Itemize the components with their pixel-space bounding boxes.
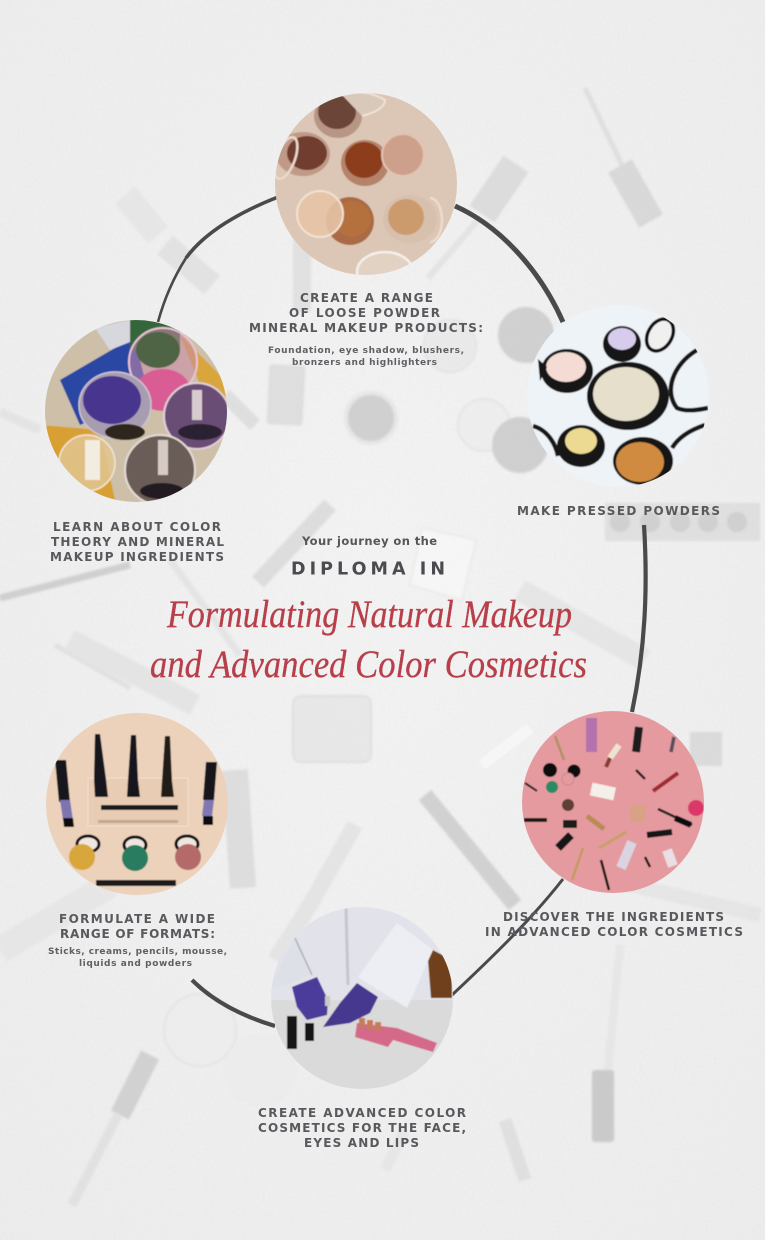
label: advanced color cosmetics: EYES AND LIPS [304, 1136, 419, 1150]
title block: Formulating Natural Makeup [166, 593, 572, 636]
label: step 1 loose powders: MINERAL MAKEUP PRODUCTS: [249, 321, 483, 335]
title block: Your journey on the [301, 534, 437, 548]
label: step 1 loose powders [249, 291, 483, 368]
photo: pressed powder compacts [525, 300, 715, 490]
photo: mineral pigments in beakers [45, 320, 227, 502]
label: step 1 loose powders: OF LOOSE POWDER [289, 306, 440, 320]
label: advanced color cosmetics: CREATE ADVANCED COLOR [258, 1106, 466, 1120]
label: advanced ingredients: IN ADVANCED COLOR COSMETICS [485, 925, 743, 939]
title block: DIPLOMA IN [291, 560, 445, 580]
label: advanced color cosmetics: COSMETICS FOR THE FACE, [258, 1121, 466, 1135]
photo: loose powder jars [275, 93, 457, 275]
label: wide range of formats: Sticks, creams, pencils, mousse, [48, 947, 227, 957]
label: color theory: MAKEUP INGREDIENTS [50, 550, 224, 564]
label: wide range of formats [48, 912, 227, 969]
title block [150, 534, 587, 686]
label: advanced color cosmetics [258, 1106, 466, 1150]
photo: scattered pink cosmetics [522, 711, 704, 893]
label: wide range of formats: RANGE OF FORMATS: [60, 927, 215, 941]
label: advanced ingredients [485, 910, 743, 939]
label: color theory: LEARN ABOUT COLOR [53, 520, 221, 534]
label: step 1 loose powders: bronzers and highlighters [292, 358, 437, 368]
label: wide range of formats: liquids and powders [79, 959, 192, 969]
title block: and Advanced Color Cosmetics [150, 643, 587, 686]
label: step 1 loose powders: CREATE A RANGE [300, 291, 433, 305]
label: color theory: THEORY AND MINERAL [51, 535, 224, 549]
label: step 1 loose powders: Foundation, eye shadow, blushers, [268, 346, 464, 356]
label: step 2 pressed powders: MAKE PRESSED POWDERS [517, 504, 720, 518]
label: wide range of formats: FORMULATE A WIDE [59, 912, 215, 926]
photo: sticks, creams and pencils [46, 713, 228, 895]
label: advanced ingredients: DISCOVER THE INGREDIENTS [503, 910, 724, 924]
photo: lab coat and purple gloves [271, 907, 453, 1089]
journey path [158, 197, 646, 1026]
label: color theory [50, 520, 224, 564]
